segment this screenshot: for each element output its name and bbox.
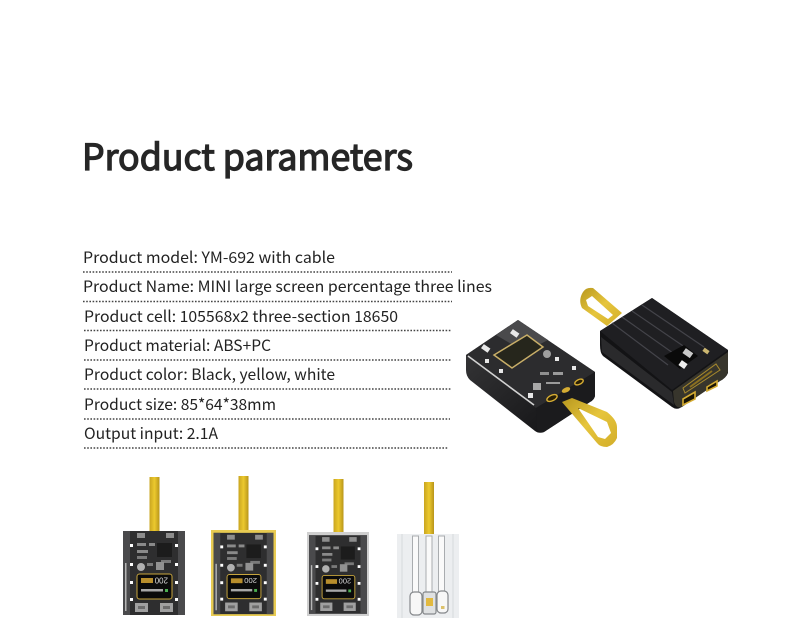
parameter list xyxy=(83,246,492,448)
device xyxy=(123,531,185,615)
white rear product view xyxy=(397,482,459,618)
strap xyxy=(334,479,344,532)
cable connectors xyxy=(664,345,698,369)
body xyxy=(466,320,595,433)
device xyxy=(214,533,274,614)
parameter: cell: Product cell: 105568x2 three-section 18650 xyxy=(84,305,398,327)
body xyxy=(600,298,728,409)
power bank, transparent front view xyxy=(466,320,617,447)
cable connectors xyxy=(410,592,422,615)
frame xyxy=(211,530,276,616)
end panel xyxy=(673,352,728,407)
parameter: model: Product model: YM-692 with cable xyxy=(83,246,335,268)
ports xyxy=(546,393,558,403)
circuit details xyxy=(481,329,576,398)
parameter: name: Product Name: MINI large screen percentage three lines xyxy=(83,275,492,297)
frame xyxy=(307,532,369,616)
strap xyxy=(424,482,434,534)
black product variant xyxy=(123,477,185,615)
parameter: output: Output input: 2.1A xyxy=(84,422,219,444)
parameter: material: Product material: ABS+PC xyxy=(84,334,271,356)
power bank, rear view with cables xyxy=(580,288,728,409)
white frame product variant xyxy=(307,479,369,616)
parameter: color: Product color: Black, yellow, white xyxy=(84,363,335,385)
strap xyxy=(150,477,160,531)
strap loop xyxy=(580,288,622,326)
strap loop xyxy=(562,398,617,447)
parameter: size: Product size: 85*64*38mm xyxy=(84,393,276,415)
device xyxy=(309,535,367,614)
ports xyxy=(683,392,695,405)
strap xyxy=(238,476,248,531)
yellow product variant xyxy=(211,476,276,616)
title: Product parameters xyxy=(82,129,413,181)
display xyxy=(494,335,543,368)
body xyxy=(397,534,459,618)
